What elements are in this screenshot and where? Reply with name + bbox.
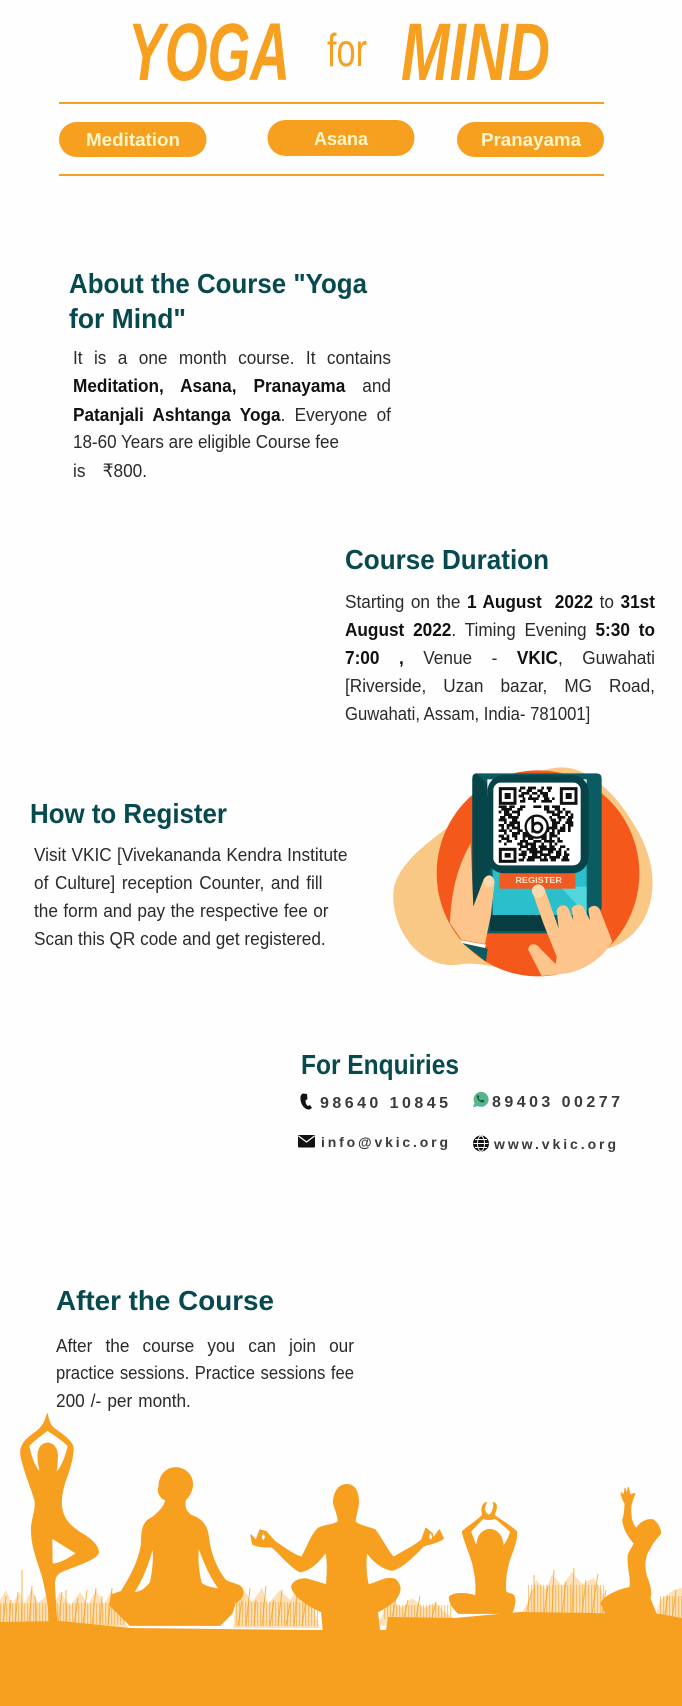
figure: seated from behind <box>110 1468 243 1625</box>
contact details <box>298 1092 620 1152</box>
heading: About the Course <box>69 268 368 334</box>
text: whatsapp number: 89403 00277 <box>492 1094 620 1111</box>
pill: Asana: Asana <box>314 129 369 149</box>
text: course duration <box>345 591 655 724</box>
text: Scan this QR code and get registered. <box>34 928 325 949</box>
QR code <box>499 788 576 861</box>
light orange blob <box>393 767 653 973</box>
title <box>128 7 550 98</box>
heading: Course Duration: Course Duration <box>345 544 549 575</box>
figure: one arm raised <box>601 1487 661 1615</box>
text: August 2022. Timing Evening 5:30 to <box>345 619 655 640</box>
phone body <box>472 773 602 933</box>
title: MIND <box>401 7 550 98</box>
text: phone number: 98640 10845 <box>320 1095 448 1112</box>
title: for <box>327 24 367 76</box>
text: the form and pay the respective fee or <box>34 900 328 921</box>
heading: About the Course: for Mind" <box>69 303 186 334</box>
text: Visit VKIC [Vivekananda Kendra Institute <box>34 844 347 865</box>
right hand <box>528 884 612 976</box>
text: Meditation, Asana, Pranayama and <box>73 375 391 396</box>
text: Patanjali Ashtanga Yoga. Everyone of <box>73 404 391 425</box>
icon: phone <box>300 1094 312 1110</box>
text: 18-60 Years are eligible Course fee <box>73 431 339 452</box>
icon: globe <box>474 1136 488 1151</box>
pill: Asana <box>268 120 414 156</box>
text: how to register <box>34 844 347 949</box>
text: after the course <box>56 1335 354 1411</box>
register button: REGISTER <box>515 876 562 885</box>
left hand <box>450 843 495 962</box>
figure: lotus meditation <box>251 1485 443 1630</box>
register button <box>499 873 575 889</box>
text: It is a one month course. It contains <box>73 347 391 368</box>
pill: Pranayama: Pranayama <box>481 130 582 150</box>
pill: Pranayama <box>457 122 604 157</box>
text: about the course <box>73 347 391 481</box>
text: website: www.vkic.org <box>493 1136 616 1152</box>
orange circle <box>437 770 639 976</box>
text: [Riverside, Uzan bazar, MG Road, <box>345 675 655 696</box>
heading: About the Course: About the Course "Yoga <box>69 268 367 299</box>
grass <box>0 1568 682 1628</box>
heading: How to Register: How to Register <box>30 798 227 829</box>
text: 200 /- per month. <box>56 1390 191 1411</box>
icon: whatsapp <box>473 1092 489 1108</box>
heading: For Enquiries: For Enquiries <box>301 1049 459 1080</box>
icon: mail <box>298 1135 315 1148</box>
text: Guwahati, Assam, India- 781001] <box>345 703 590 724</box>
heading: After the Course: After the Course <box>56 1285 274 1316</box>
text: Starting on the 1 August 2022 to 31st <box>345 591 655 612</box>
text: email: info@vkic.org <box>321 1134 448 1150</box>
figure: tree pose <box>21 1414 98 1623</box>
course components band <box>59 102 604 176</box>
ground <box>0 1612 682 1706</box>
QR frame <box>487 775 589 873</box>
illustration: hands holding phone with QR code <box>393 767 653 976</box>
text: practice sessions. Practice sessions fee <box>56 1362 354 1383</box>
text: After the course you can join our <box>56 1335 354 1356</box>
text: is ₹800. <box>73 460 147 481</box>
text: of Culture] reception Counter, and fill <box>34 872 322 893</box>
QR centre logo <box>526 816 548 838</box>
title: YOGA <box>128 7 290 98</box>
figure: arms raised <box>449 1502 517 1613</box>
text: 7:00 , Venue - VKIC, Guwahati <box>345 647 655 668</box>
pill: Meditation: Meditation <box>86 130 180 150</box>
pill: Meditation <box>59 122 206 157</box>
